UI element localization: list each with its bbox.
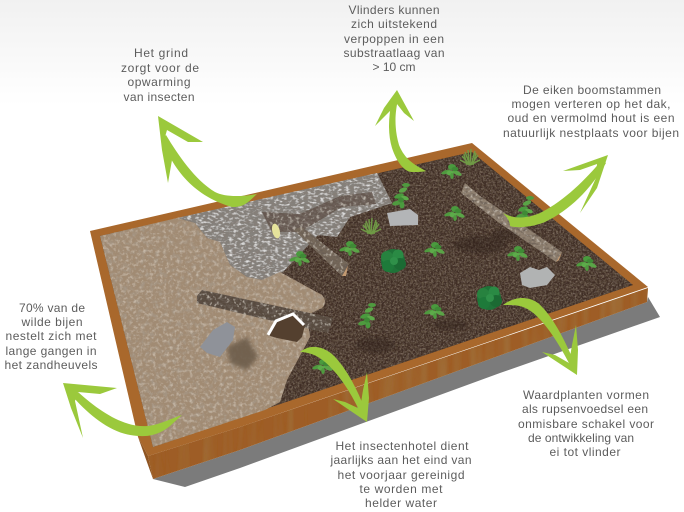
text: butterflies [344, 3, 444, 74]
text: host plants: de ontwikkeling van [528, 431, 634, 445]
text: sand hills: 70% van de [19, 301, 85, 315]
host plants [289, 149, 597, 374]
background gradient [0, 0, 684, 105]
soil mottling [355, 229, 519, 353]
text: butterflies: zich uitstekend [351, 17, 437, 31]
text: insect hotel: het voorjaar gereinigd [338, 468, 464, 482]
text: gravel [121, 46, 199, 104]
text: host plants: Waardplanten vormen [523, 388, 649, 402]
arrow: butterflies [375, 90, 426, 172]
text: sand hills: wilde bijen [20, 315, 82, 329]
text: gravel: zorgt voor de [121, 61, 199, 75]
log on soil, right [461, 183, 562, 262]
text: oak logs: natuurlijk nestplaats voor bijen [503, 126, 679, 140]
text: gravel: opwarming [128, 75, 190, 89]
arrow: insect hotel [300, 347, 369, 422]
text: insect hotel: Het insectenhotel dient [336, 439, 469, 453]
text: oak logs: oud en vermolmd hout is een [508, 111, 674, 125]
text: oak logs [503, 83, 679, 140]
grey stone on sand [200, 322, 235, 357]
arrow: oak logs [503, 155, 608, 227]
text: butterflies: substraatlaag van [344, 46, 444, 60]
text: insect hotel: jaarlijks aan het eind van [330, 453, 472, 467]
text: insect hotel: helder water [365, 496, 437, 510]
text: insect hotel [330, 439, 472, 510]
text: oak logs: De eiken boomstammen [523, 83, 661, 97]
wooden frame [90, 143, 648, 479]
log on sand [197, 290, 333, 333]
text: host plants: als rupsenvoedsel een [522, 402, 648, 416]
text: sand hills: lange gangen in [6, 344, 96, 358]
stone shadow [227, 337, 258, 370]
text: host plants: ei tot vlinder [550, 445, 620, 459]
text: host plants [518, 388, 654, 459]
text: butterflies: verpoppen in een [344, 32, 444, 46]
arrow: host plants [503, 298, 578, 375]
log on gravel, front [293, 227, 349, 276]
text: host plants: onmisbare schakel voor [518, 417, 654, 431]
text: sand hills [4, 301, 98, 372]
soil area [100, 152, 633, 447]
text: oak logs: mogen verteren op het dak, [512, 97, 670, 111]
grey stone on soil, back [387, 209, 418, 226]
grey stone on soil, right [520, 267, 555, 288]
text: gravel: van insecten [124, 90, 194, 104]
yellow leaf on gravel [270, 223, 282, 239]
text: gravel: Het grind [134, 46, 188, 60]
text: butterflies: Vlinders kunnen [348, 3, 440, 17]
log on gravel, back [262, 192, 376, 232]
arrow: gravel [158, 116, 257, 207]
sand area [100, 218, 325, 447]
insect hotel [267, 313, 305, 342]
garden bed illustration [90, 143, 660, 487]
arrow: sand hills [63, 383, 182, 438]
text: sand hills: het zandheuvels [4, 358, 98, 372]
text: butterflies: > 10 cm [372, 60, 416, 74]
text: insect hotel: te worden met [360, 482, 443, 496]
ground shadow [153, 297, 660, 487]
gravel area [177, 173, 392, 280]
text: sand hills: nestelt zich met [6, 329, 97, 343]
